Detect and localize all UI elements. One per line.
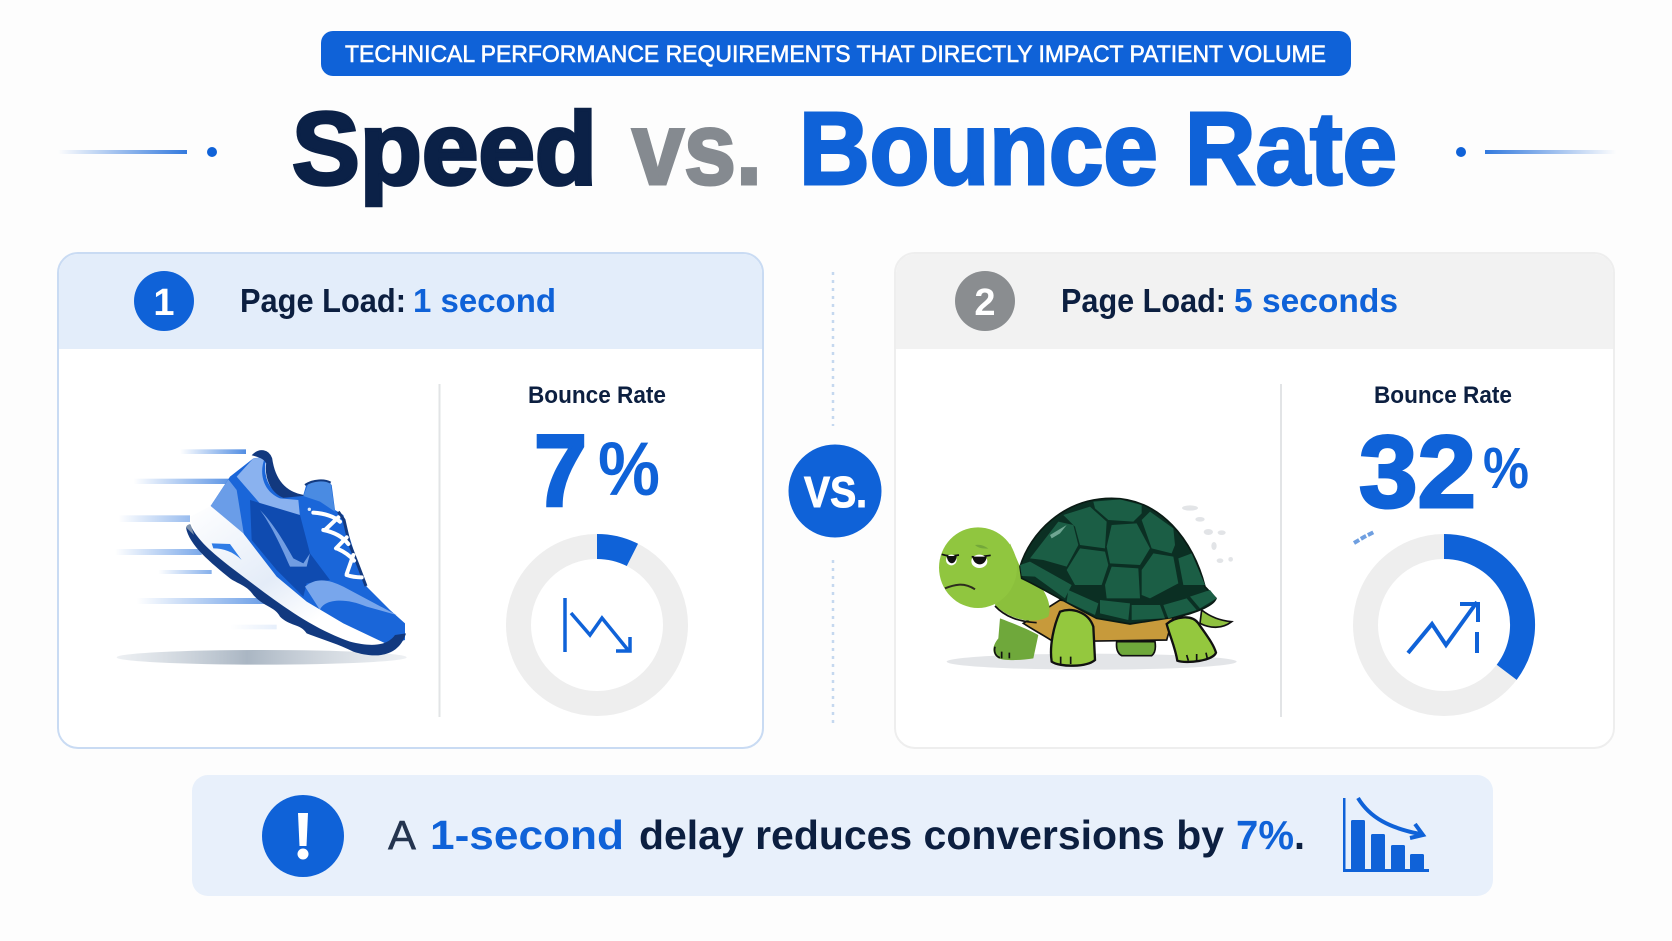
- callout text: 1-second: [430, 812, 624, 858]
- callout text: delay reduces conversions by: [639, 812, 1224, 858]
- bounce rate value 7%: %: [598, 427, 660, 512]
- vs badge: [788, 444, 882, 538]
- panel divider: [1280, 384, 1282, 717]
- number badge 2: 2: [974, 282, 996, 324]
- vs badge: VS.: [804, 468, 867, 517]
- bounce rate value 32%: [1359, 415, 1529, 529]
- callout text: [388, 812, 1305, 858]
- page load label: 1 second: [413, 282, 556, 319]
- page load label: Page Load:: [240, 282, 406, 319]
- icon: trend up: [1408, 602, 1478, 653]
- stray speck: [1354, 532, 1374, 543]
- page load label: Page Load:: [1061, 282, 1226, 319]
- bounce rate value 7%: 7: [534, 414, 587, 528]
- callout text: A: [388, 812, 417, 858]
- panel: page load 1 second: [58, 253, 763, 748]
- number badge 1: 1: [153, 282, 175, 324]
- panel header: [59, 254, 762, 349]
- icon: turtle: [939, 498, 1237, 670]
- title: Bounce Rate: [799, 91, 1397, 206]
- page load label: [240, 282, 556, 319]
- icon: declining bar chart: [1343, 798, 1429, 872]
- title: [292, 91, 1397, 206]
- icon: trend down: [565, 598, 630, 652]
- donut chart 32%: [1366, 546, 1523, 704]
- bounce rate label: Bounce Rate: [1374, 382, 1512, 409]
- kicker pill: [321, 31, 1351, 76]
- callout text: .: [1294, 812, 1305, 858]
- panel divider: [438, 384, 440, 717]
- kicker pill: TECHNICAL PERFORMANCE REQUIREMENTS THAT DIRECTLY IMPACT PATIENT VOLUME: [345, 41, 1326, 68]
- bounce rate value 7%: [534, 414, 660, 528]
- icon: alert: [262, 795, 344, 877]
- centre dotted divider: [832, 272, 834, 727]
- right title ornament: [1456, 147, 1616, 157]
- icon: running shoe: [115, 449, 407, 665]
- page load label: [1061, 282, 1398, 319]
- donut chart 7%: [518, 546, 676, 704]
- title: vs.: [632, 91, 762, 206]
- panel: page load 5 seconds: [895, 253, 1614, 748]
- number badge 1: [134, 271, 194, 331]
- bounce rate label: Bounce Rate: [528, 382, 666, 409]
- callout text: 7%: [1236, 812, 1294, 858]
- number badge 2: [955, 271, 1015, 331]
- bounce rate value 32%: %: [1483, 436, 1529, 501]
- panel header: [896, 254, 1613, 349]
- title: Speed: [292, 91, 597, 206]
- bounce rate value 32%: 32: [1359, 415, 1476, 529]
- left title ornament: [58, 147, 217, 157]
- page load label: 5 seconds: [1234, 282, 1398, 319]
- callout banner: [192, 775, 1493, 896]
